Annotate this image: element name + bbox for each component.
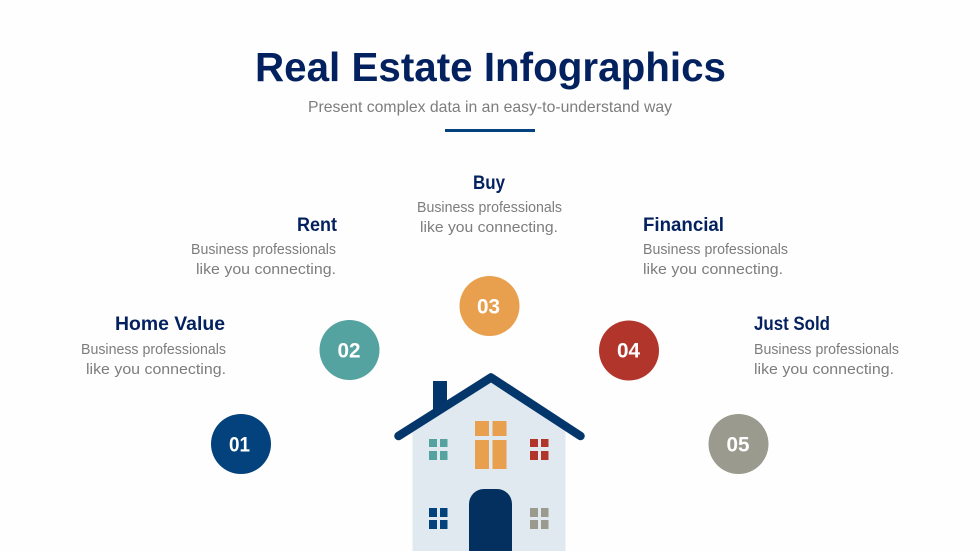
badge 05 xyxy=(708,414,768,474)
badge 05: 05 xyxy=(726,434,750,456)
centre window xyxy=(475,421,506,469)
subtitle: Present complex data in an easy-to-understand way xyxy=(308,99,672,116)
text block: Buy: Buy xyxy=(473,173,505,194)
text block: Financial: Financial xyxy=(643,215,724,236)
text block: Financial xyxy=(643,215,788,278)
badge 04 xyxy=(599,320,659,380)
door xyxy=(469,489,512,551)
roof xyxy=(398,378,580,436)
text block: Financial: Business professionals xyxy=(643,242,788,258)
badge 02 xyxy=(320,320,380,380)
text block: Just Sold xyxy=(754,314,899,378)
badge 04: 04 xyxy=(617,340,640,362)
grey window xyxy=(530,508,548,529)
text block: Home Value: like you connecting. xyxy=(86,362,226,378)
badge 01 xyxy=(211,414,271,474)
text block: Just Sold: Business professionals xyxy=(754,342,899,358)
text block: Rent xyxy=(191,215,338,278)
blue window xyxy=(429,508,448,529)
teal window xyxy=(429,439,448,460)
red window xyxy=(530,439,548,460)
text block: Financial: like you connecting. xyxy=(643,262,783,278)
text block: Buy: like you connecting. xyxy=(420,220,558,236)
icon: house xyxy=(398,378,580,551)
house body xyxy=(412,378,566,551)
badge 03 xyxy=(460,276,520,336)
text block: Rent: like you connecting. xyxy=(196,262,336,278)
badge 01: 01 xyxy=(229,434,250,456)
badge 03: 03 xyxy=(477,296,500,318)
chimney xyxy=(433,381,447,414)
text block: Home Value: Home Value xyxy=(115,314,225,335)
text block: Home Value: Business professionals xyxy=(81,342,226,358)
text block: Rent: Business professionals xyxy=(191,242,336,258)
text block: Buy xyxy=(417,173,562,236)
text block: Buy: Business professionals xyxy=(417,200,562,216)
title: Real Estate Infographics xyxy=(255,44,726,90)
badge 02: 02 xyxy=(338,340,360,362)
title underline xyxy=(445,129,535,132)
text block: Home Value xyxy=(81,314,226,378)
text block: Just Sold: Just Sold xyxy=(754,314,830,335)
text block: Rent: Rent xyxy=(297,215,338,236)
text block: Just Sold: like you connecting. xyxy=(754,362,894,378)
